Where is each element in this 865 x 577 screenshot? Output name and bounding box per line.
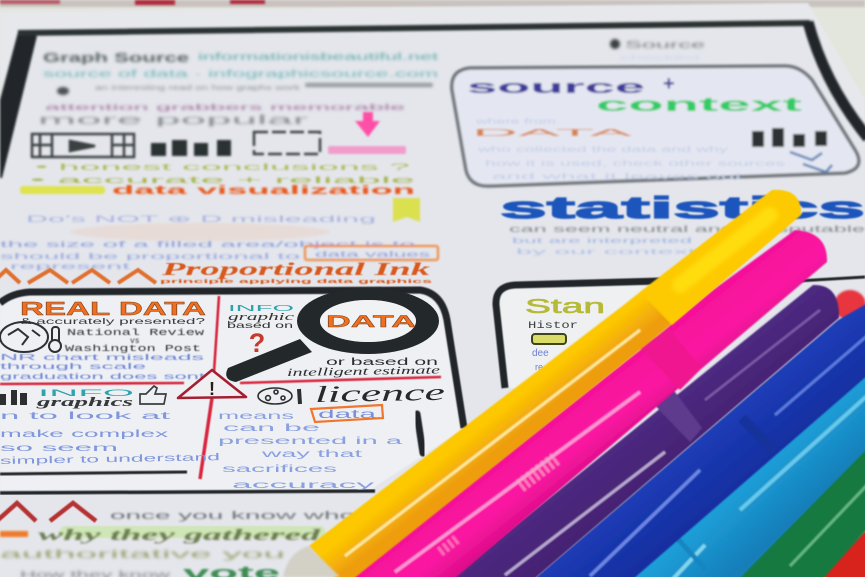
handwritten line one: but are interpreted: [512, 238, 692, 245]
estimate caption: [287, 357, 440, 379]
icon: pink arrow: [355, 112, 380, 137]
bottom section: [0, 503, 355, 577]
magnifier label: data: DATA: [326, 312, 416, 331]
source comparison: vs: [130, 337, 140, 346]
yellow cap highlight: [680, 215, 770, 285]
icon: magnifying glass: [226, 288, 439, 382]
icon: bars: [151, 140, 231, 156]
source comparison: National Review: [67, 328, 205, 338]
handwritten note: left column: so seem: [0, 443, 118, 454]
script line: why they gathered: why they gathered: [38, 527, 322, 544]
handwritten note: chart misleads: graduation does sont: [0, 371, 207, 381]
line: authoritative: authoritative you: [0, 547, 285, 561]
estimate caption: intelligent estimate: [287, 364, 440, 379]
orange mark: [0, 531, 28, 537]
blue pen highlight: [590, 470, 700, 576]
pink pen print: [520, 457, 558, 486]
tagline: can seem neutral and indisputable: [509, 224, 865, 234]
heading: info graphic: graphic: [228, 312, 295, 323]
panel bottom rule: [0, 491, 375, 493]
frame top edge: [18, 23, 810, 33]
inner rule: [0, 472, 187, 474]
panel frame: [0, 290, 464, 428]
red divider lines: [0, 296, 441, 479]
script heading: Proportional Ink: [160, 259, 430, 279]
orange subline: principle applying data graphics: [160, 279, 433, 285]
badge icon: [610, 39, 620, 49]
heading: more popular: more popular: [38, 112, 310, 127]
small icon: [57, 87, 69, 95]
icon: question mark: ?: [249, 328, 265, 358]
cyan pen cap band: [668, 528, 706, 570]
handwritten note: chart misleads: NR chart misleads: [0, 352, 204, 362]
line: history: Histor: [528, 320, 578, 332]
grey note: an interesting read on how graphs work: [95, 85, 301, 92]
icon: warning triangle: [178, 370, 246, 399]
icon: palette and brush: [258, 388, 300, 404]
handwritten lines: how it is used, check other sources: [485, 159, 785, 168]
yellow pen: [309, 190, 801, 577]
heading: info graphic: [227, 304, 295, 330]
heading: standards: Stan: [525, 296, 605, 318]
handwritten note: right column: accuracy: [232, 480, 374, 491]
handwritten lines: and what it leaves out: [492, 172, 744, 181]
orange callout box: data values: [315, 250, 430, 259]
yellow highlight: [20, 186, 105, 194]
handwritten note: dee: [532, 348, 549, 359]
purple cap highlight: [705, 310, 820, 400]
callout: data: [311, 405, 383, 422]
red mark: [834, 290, 865, 320]
callout: data: data: [318, 407, 377, 421]
source comparison: Washington Post: [65, 344, 201, 354]
icon: outlined letters: [532, 334, 566, 344]
line: once you know: once you know who: [110, 510, 355, 522]
subheading: & accurately presented?: [20, 316, 206, 326]
handwritten note: left column: [0, 411, 220, 467]
handwritten note: right column: presented in a: [218, 436, 403, 447]
heading: info graphic: based on: [227, 320, 293, 330]
teal source line two: source of data · infographicsource.com: [43, 69, 438, 80]
icon row: [32, 112, 406, 157]
highlighted questions: [20, 162, 420, 222]
heading: context: context: [596, 95, 804, 116]
pink pen print lower: [440, 538, 458, 552]
cyan pen lower highlight: [672, 545, 705, 577]
cyan pen highlight: [740, 395, 865, 510]
cyan pen: [628, 372, 865, 577]
handwritten note: right column: way that: [259, 449, 363, 460]
badge note: checklist: [620, 55, 700, 62]
heading: info graphics: graphics: [35, 394, 133, 409]
heading: graph source: Graph Source: [43, 50, 189, 65]
panel: real data: [0, 288, 464, 493]
frame right edge: [808, 22, 865, 138]
pink highlight bar: [328, 146, 406, 154]
top right badge: [610, 39, 706, 62]
handwritten note: left column: simpler to understand: [0, 452, 220, 467]
handwritten note: left column: make complex: [0, 429, 168, 440]
heading: info graphic: INFO: [228, 304, 294, 313]
purple pen: [448, 285, 839, 577]
handwritten note: right column: means: [218, 411, 294, 422]
grey bar: [305, 83, 433, 87]
blue pen: [533, 303, 865, 577]
yellow pen cap: [640, 190, 801, 325]
orange callout box: [305, 246, 438, 260]
proportional ink heading: [160, 259, 433, 285]
panel outline: [452, 66, 859, 186]
panel: source and context: [452, 66, 859, 186]
icon: monitor: [254, 132, 320, 154]
yellow badge: [393, 198, 420, 222]
question line two: • accurate + reliable: [30, 175, 415, 185]
handwritten note two: re: [535, 362, 543, 372]
page frame: [0, 22, 865, 178]
heading: source: source: [467, 77, 645, 97]
icon: thumbs up: [140, 386, 166, 404]
magenta line: attention grabbers memorable: [45, 103, 407, 112]
green highlight: [60, 526, 325, 538]
badge text: Source: [625, 40, 706, 51]
purple pen highlight: [505, 452, 665, 575]
icon: bars: [752, 128, 827, 147]
frame left edge: [0, 32, 37, 178]
pink pen: [348, 230, 827, 577]
plus sign: +: [663, 73, 675, 95]
red pen: [815, 528, 865, 577]
handwritten note: right column: can be: [223, 423, 321, 434]
header block: graph source: [38, 50, 438, 127]
pen tip: [283, 546, 340, 577]
panel frame stroke: [496, 281, 660, 388]
handwritten note: right column: [218, 411, 403, 491]
heading: licence: licence: [315, 380, 445, 407]
icon: film strip: [32, 134, 134, 157]
heading: info graphics: [35, 388, 134, 409]
handwritten note: right column: sacrifices: [222, 464, 337, 475]
green pen highlight: [790, 484, 865, 566]
blue cap highlight: [775, 335, 865, 415]
handwritten lines: where from: [474, 117, 557, 126]
teal source line one: informationisbeautiful.net: [198, 52, 438, 63]
icon: side pen bar: [417, 414, 423, 453]
panel fill: [0, 294, 462, 490]
handwritten note: left column: n to look at: [0, 411, 171, 422]
handwritten lines: who collected the data and why: [476, 145, 728, 154]
blue pen cap band: [742, 418, 775, 452]
red chevrons: [0, 503, 96, 521]
note: size line one: the size of a filled area/object is to: [0, 240, 417, 249]
heading: data visualization: data visualization: [112, 183, 415, 197]
handwritten note: chart misleads: [0, 352, 207, 381]
panel: standards: [496, 277, 865, 388]
handwritten note: chart misleads: through scale: [0, 361, 147, 371]
handwritten notes: [0, 214, 438, 271]
icon: bars small: [0, 390, 27, 405]
icon: warning triangle: !: [209, 379, 215, 399]
statistics notes: [509, 224, 865, 256]
icon: globe and thermometer: [0, 322, 61, 352]
icon: check marks: [790, 152, 832, 172]
panel frame right: [780, 277, 865, 282]
handwritten line two: by our context: [516, 249, 696, 256]
handwritten lines: [474, 117, 785, 181]
heading: info graphics: INFO: [38, 388, 134, 398]
estimate caption: or based on: [326, 357, 438, 368]
note: size line two: should be proportional to: [0, 252, 302, 261]
orange smear: [70, 223, 330, 241]
orange chevrons: [0, 270, 156, 283]
pink pen cap band: [640, 328, 702, 390]
source comparison: [65, 328, 205, 354]
green pen: [735, 445, 865, 577]
pink pen highlight: [395, 392, 640, 572]
purple pen cap band: [648, 388, 702, 442]
note: size line three: represent: [10, 262, 133, 271]
panel fill: [496, 281, 660, 388]
heading: real data: REAL DATA: [20, 299, 206, 319]
heading: statistics: statistics: [500, 190, 865, 225]
subheading: data: DATA: [472, 128, 634, 139]
note: top row: Do's NOT ⊕ D misleading: [26, 214, 376, 224]
yellow pen highlight: [345, 330, 640, 556]
question line one: • honest conclusions ?: [35, 162, 410, 172]
